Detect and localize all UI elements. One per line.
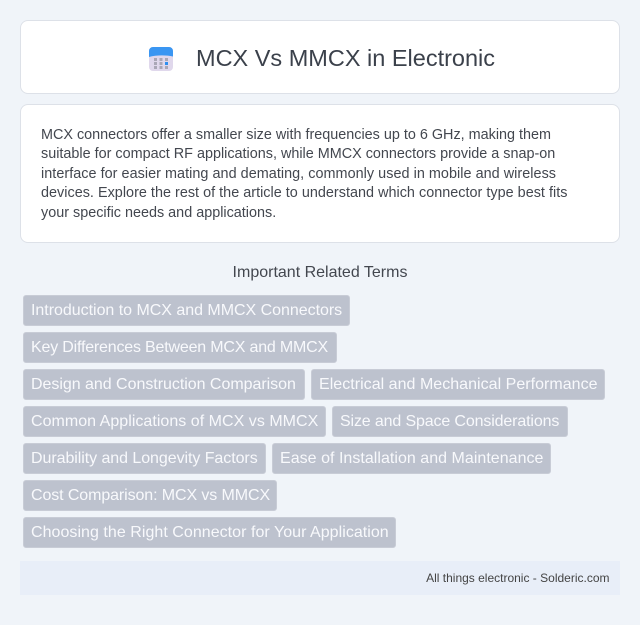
tag: Durability and Longevity Factors [31,450,258,467]
tag [23,406,326,437]
tag: Introduction to MCX and MMCX Connectors [31,302,342,319]
intro paragraph: interface for easier mating and demating, commonly used in mobile and wireless [41,166,556,182]
title card [20,20,620,94]
tag: Cost Comparison: MCX vs MMCX [31,487,270,504]
tag: Common Applications of MCX vs MMCX [31,413,318,430]
intro paragraph: MCX connectors offer a smaller size with frequencies up to 6 GHz, making them [41,126,551,142]
tag: Choosing the Right Connector for Your Application [31,524,389,541]
title: MCX Vs MMCX in Electronic [196,45,495,71]
icon: calendar [149,47,173,71]
intro paragraph: your specific needs and applications. [41,204,276,220]
intro text card [20,104,620,243]
tag [272,443,551,474]
tag: Design and Construction Comparison [31,376,296,393]
tag [23,517,396,548]
footer [20,561,620,595]
tag [23,332,337,363]
tag [23,480,277,511]
intro paragraph: suitable for compact RF applications, while MMCX connectors provide a snap-on [41,146,555,162]
tag [311,369,605,400]
intro paragraph: devices. Explore the rest of the article to understand which connector type best fits [41,185,567,201]
footer: All things electronic - Solderic.com [426,571,610,585]
tag [23,369,305,400]
tag list [23,295,605,548]
tag [23,443,266,474]
tag [23,295,350,326]
intro paragraph [41,126,567,220]
tag [332,406,568,437]
tag: Electrical and Mechanical Performance [319,376,598,393]
tag: Size and Space Considerations [340,413,559,430]
tag: Key Differences Between MCX and MMCX [31,339,328,356]
heading: related terms: Important Related Terms [233,264,407,281]
tag: Ease of Installation and Maintenance [280,450,543,467]
